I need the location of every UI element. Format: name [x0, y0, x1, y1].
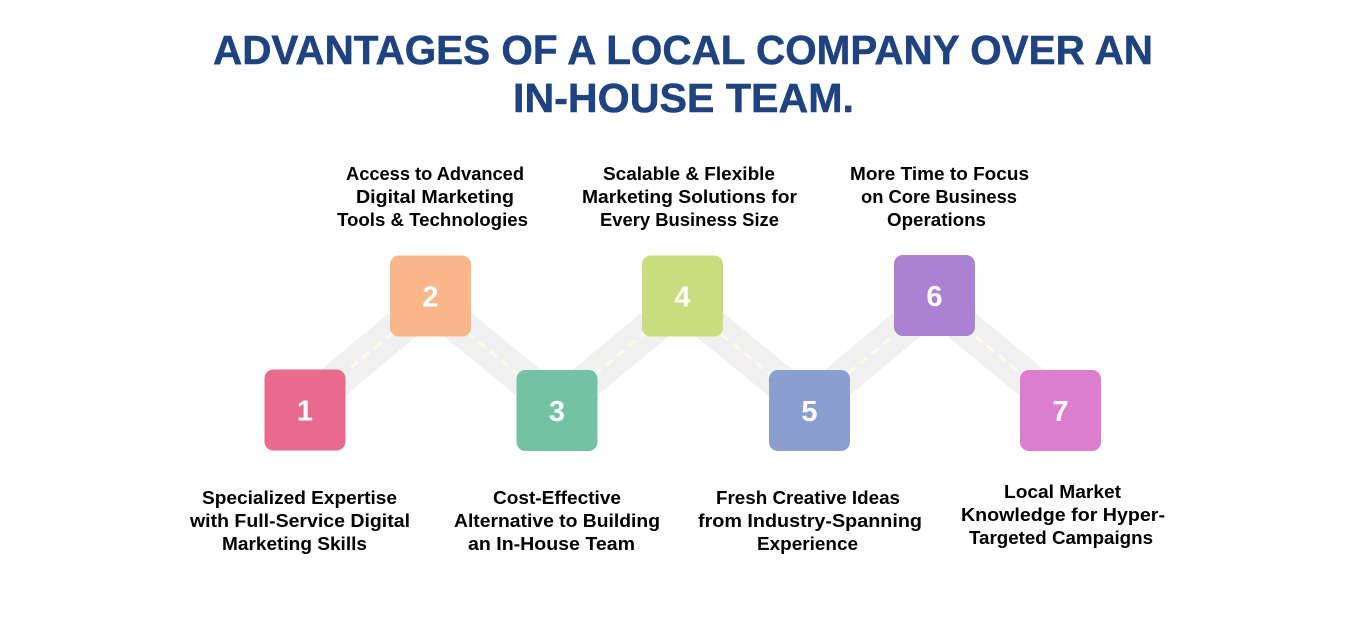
label: step 3: Alternative to Building	[454, 510, 660, 531]
label: step 2: Tools & Technologies	[337, 209, 528, 230]
step 1	[264, 370, 346, 450]
label: step 5	[698, 487, 922, 554]
label: step 6: More Time to Focus	[850, 163, 1029, 184]
label: step 3: Cost-Effective	[493, 487, 621, 508]
label: step 3	[454, 487, 660, 554]
label: step 1	[189, 487, 410, 554]
step 3: 3	[549, 396, 565, 428]
step 4: 4	[674, 282, 691, 314]
label: step 4: Scalable & Flexible	[603, 163, 775, 184]
step 3	[516, 370, 598, 451]
label: step 2	[337, 163, 528, 230]
title	[213, 27, 1153, 121]
step 5: 5	[801, 396, 818, 428]
step 4	[642, 256, 723, 336]
label: step 5: from Industry-Spanning	[698, 510, 922, 531]
title: ADVANTAGES OF A LOCAL COMPANY OVER AN	[213, 27, 1153, 73]
label: step 6: on Core Business	[861, 186, 1017, 207]
step 2: 2	[422, 282, 439, 314]
label: step 1: with Full-Service Digital	[189, 510, 410, 531]
step 2	[390, 256, 471, 336]
step 7: 7	[1052, 396, 1069, 428]
title: IN-HOUSE TEAM.	[513, 75, 854, 121]
label: step 6: Operations	[887, 209, 986, 230]
label: step 5: Experience	[757, 533, 858, 554]
label: step 3: an In-House Team	[468, 533, 635, 554]
label: step 5: Fresh Creative Ideas	[716, 487, 900, 508]
label: step 7: Targeted Campaigns	[969, 527, 1153, 548]
label: step 1: Marketing Skills	[222, 533, 367, 554]
label: step 7	[961, 481, 1165, 548]
step 6	[894, 255, 975, 336]
zigzag connector path	[305, 302, 1060, 406]
label: step 2: Access to Advanced	[346, 163, 524, 184]
label: step 4	[582, 163, 797, 230]
label: step 2: Digital Marketing	[356, 186, 514, 207]
label: step 7: Knowledge for Hyper-	[961, 504, 1165, 525]
label: step 4: Every Business Size	[600, 209, 779, 230]
label: step 4: Marketing Solutions for	[582, 186, 797, 207]
step 7	[1020, 370, 1101, 451]
label: step 7: Local Market	[1004, 481, 1121, 502]
step 6: 6	[926, 281, 943, 313]
label: step 1: Specialized Expertise	[202, 487, 397, 508]
label: step 6	[850, 163, 1029, 230]
step 5	[769, 370, 850, 451]
step 1: 1	[297, 396, 313, 428]
